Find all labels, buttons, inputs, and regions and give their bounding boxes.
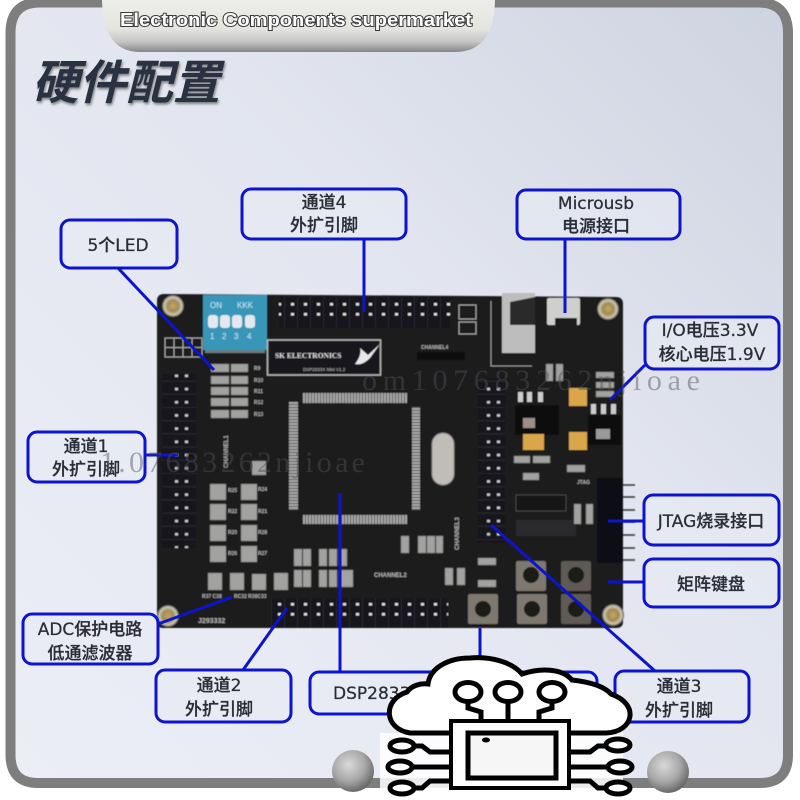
icon: cloud chip <box>380 658 632 800</box>
callout leader lines <box>118 239 655 672</box>
passive components left: R25 <box>228 488 237 494</box>
callout: channel 4: 外扩引脚 <box>290 216 358 236</box>
passive components centre: J293332 <box>198 618 225 625</box>
watermark text: om107683262njioae <box>362 364 700 397</box>
callout: channel 1: 通道1 <box>64 437 108 457</box>
callout: DSP <box>310 672 597 714</box>
callout: matrix keypad <box>644 559 779 607</box>
callout: channel 1: 外扩引脚 <box>52 460 120 480</box>
passive components left: R28 <box>258 530 267 536</box>
decorative spheres <box>332 750 689 793</box>
callout: voltages <box>645 317 779 369</box>
logo plate: SK ELECTRONICS <box>275 351 341 360</box>
JTAG header <box>577 478 635 563</box>
passive components left <box>202 461 288 600</box>
passive components left: R26 <box>228 551 237 557</box>
passive components left: R27 <box>258 551 267 557</box>
chip inner <box>468 733 556 778</box>
callout: channel 2: 外扩引脚 <box>185 700 253 720</box>
header tab <box>102 0 495 52</box>
passive components left: R24 <box>258 487 267 493</box>
LED row: R9 <box>254 366 261 372</box>
tactile buttons <box>468 558 591 624</box>
passive components centre <box>198 517 465 625</box>
circuit board photo <box>157 293 635 628</box>
board substrate <box>157 294 623 628</box>
white backing <box>380 733 623 800</box>
title: 硬件配置 <box>32 56 225 109</box>
passive components left: RC32 R38C33 <box>234 594 267 600</box>
callout: channel 4 <box>242 189 406 239</box>
LED row: R12 <box>254 400 263 406</box>
channel 1 header: CHANNEL1 <box>224 435 230 468</box>
passive components left: R20 <box>228 530 237 536</box>
callout: voltages: 核心电压1.9V <box>659 345 766 365</box>
callout: JTAG: JTAG烧录接口 <box>657 512 764 532</box>
power switch <box>491 293 535 366</box>
callout: channel 3: 外扩引脚 <box>645 701 713 721</box>
channel 2 header <box>270 598 448 628</box>
channel 4 header <box>279 297 450 328</box>
LED row <box>211 364 263 418</box>
callout: channel 1 <box>28 432 145 482</box>
callout: LEDs: 5个LED <box>87 236 149 256</box>
watermark text <box>100 364 700 479</box>
callout: channel 2 <box>156 670 291 722</box>
callout: DSP: DSP28335 <box>333 684 421 704</box>
callout: JTAG <box>644 495 779 545</box>
callout: ADC: ADC保护电路 <box>38 620 142 640</box>
voltage regulators and capacitors <box>514 364 621 536</box>
mounting posts <box>157 295 624 627</box>
circuit nodes <box>388 682 632 794</box>
LED row: R13 <box>254 412 263 418</box>
passive components left: R21 <box>258 509 267 515</box>
callout: micro USB: Microusb <box>558 194 634 214</box>
chip outline <box>451 721 569 788</box>
callout: matrix keypad: 矩阵键盘 <box>677 575 745 595</box>
passive components left: R22 <box>228 509 237 515</box>
channel 1 header <box>162 374 230 548</box>
callout: channel 2: 通道2 <box>197 676 241 696</box>
DIP switch: KKK <box>237 301 254 310</box>
cloud <box>389 658 630 733</box>
passive components centre: CHANNEL2 <box>374 573 407 579</box>
callout: micro USB: 电源接口 <box>562 217 630 237</box>
JTAG header: JTAG <box>577 480 590 486</box>
callout: ADC <box>23 614 158 664</box>
micro USB socket <box>547 298 580 326</box>
side jumpers: CHANNEL4 <box>421 345 448 351</box>
DIP switch: 2 <box>222 332 227 341</box>
crystal <box>432 433 454 485</box>
jumper block <box>165 338 202 357</box>
tab title: Electronic Components supermarket <box>120 9 472 30</box>
DIP switch: 1 <box>210 332 215 341</box>
DIP switch: ON <box>210 301 222 310</box>
callout: micro USB <box>517 190 680 239</box>
logo plate <box>268 340 380 375</box>
DIP switch: 3 <box>234 332 239 341</box>
callout: ADC: 低通滤波器 <box>48 644 132 664</box>
LED row: R10 <box>254 378 263 384</box>
DIP switch: 4 <box>247 332 252 341</box>
LED row: R11 <box>254 389 263 395</box>
passive components centre: CHANNEL3 <box>455 517 461 550</box>
callout: channel 3: 通道3 <box>657 677 701 697</box>
callout: channel 3 <box>615 671 749 722</box>
watermark text: 1.07683262njioae <box>100 446 365 479</box>
callout: voltages: I/O电压3.3V <box>662 321 759 341</box>
callout: channel 4: 通道4 <box>302 193 346 213</box>
logo plate: DSP2833X Mini V1.2 <box>303 367 346 372</box>
side jumpers <box>417 305 476 360</box>
passive components left: R37 C38 <box>202 594 222 600</box>
DIP switch <box>203 295 267 353</box>
callout: LEDs <box>61 220 177 268</box>
channel 3 header <box>478 378 505 543</box>
DSP chip <box>289 393 420 524</box>
